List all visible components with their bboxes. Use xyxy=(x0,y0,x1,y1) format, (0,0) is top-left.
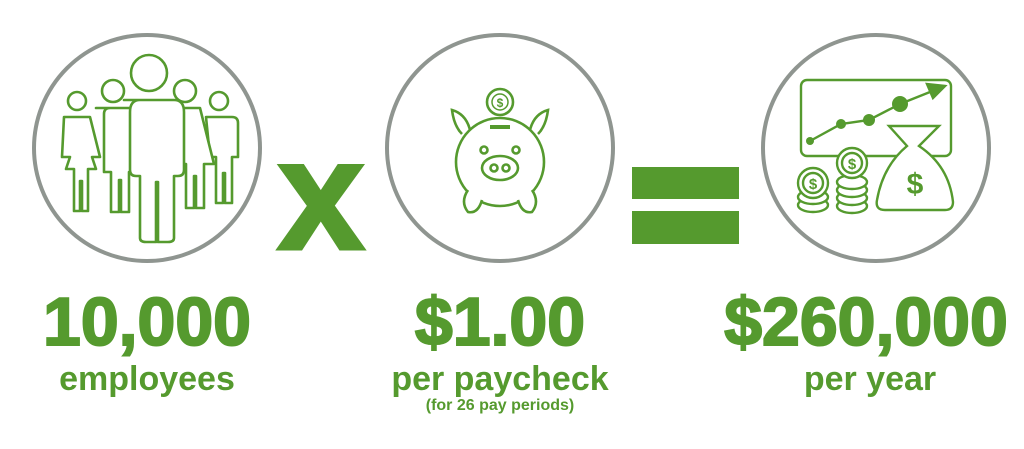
circle: per year xyxy=(763,35,989,261)
circle: paycheck xyxy=(387,35,613,261)
circle: employees xyxy=(34,35,260,261)
panel: per paycheck xyxy=(387,35,613,414)
icon: equals sign xyxy=(632,167,739,244)
label: for 26 pay periods: (for 26 pay periods) xyxy=(426,397,574,414)
label: employees: employees xyxy=(59,360,235,398)
icon: group of people xyxy=(62,55,238,242)
panel: per year: $ xyxy=(809,176,818,193)
label: per year: per year xyxy=(804,360,936,398)
panel: per paycheck: $ xyxy=(497,96,504,110)
number: $1.00: $1.00 xyxy=(415,284,585,360)
label: per paycheck: per paycheck xyxy=(391,360,609,398)
panel: per year: $ xyxy=(907,168,924,201)
icon: chart with money xyxy=(798,80,953,213)
panel: employees xyxy=(34,35,260,398)
icon: piggy bank xyxy=(452,89,548,212)
panel: per year: $ xyxy=(848,156,857,173)
number: 10,000: 10,000 xyxy=(43,284,251,360)
number: $260,000: $260,000 xyxy=(724,284,1008,360)
icon: multiply sign: x xyxy=(277,107,365,283)
panel: per year xyxy=(724,35,1008,398)
